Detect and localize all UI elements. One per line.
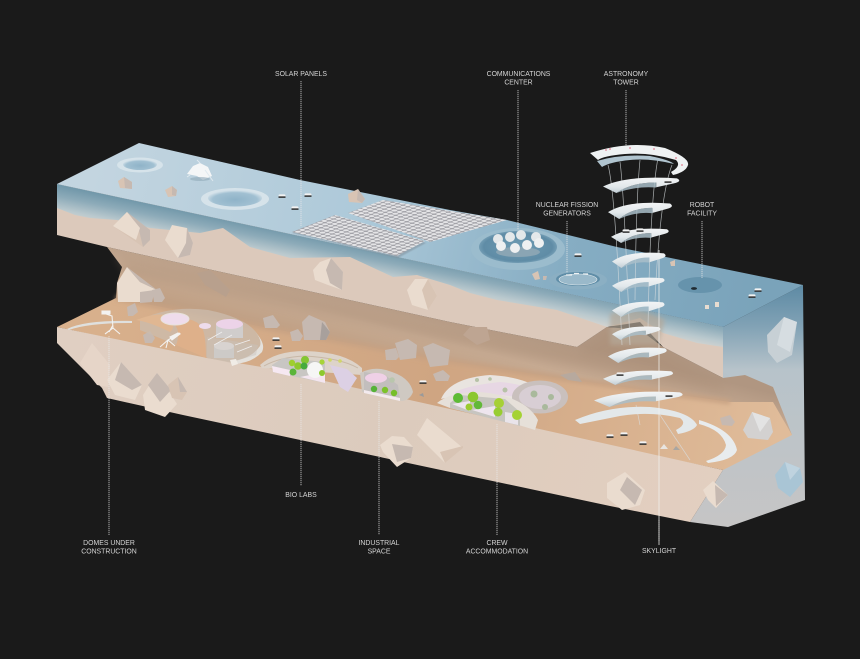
- skylight column: [658, 250, 660, 545]
- tan mound: [136, 314, 173, 332]
- label: industrial space: INDUSTRIAL: [359, 540, 400, 547]
- label: domes under construction: [81, 336, 137, 556]
- ring 9: [608, 348, 667, 363]
- label: astronomy tower: ASTRONOMY: [604, 71, 649, 78]
- pink tanks: [161, 313, 189, 325]
- ring 12: [575, 407, 697, 434]
- lilac panel: [330, 365, 357, 392]
- panel: cave back wall: [107, 247, 792, 435]
- front boulder 8: [703, 481, 728, 508]
- label: robot facility: FACILITY: [687, 210, 717, 218]
- front boulder 2: [107, 362, 142, 400]
- crater 1: [117, 158, 163, 172]
- outer dome shell: [140, 309, 262, 363]
- front boulder 4: [168, 377, 187, 400]
- front boulder left: [80, 343, 110, 387]
- ring 5: [612, 253, 666, 268]
- lunar base cross-section illustration: [57, 143, 805, 545]
- label: robot facility: [687, 202, 717, 278]
- label: skylight: [642, 520, 677, 555]
- label: astronomy tower: [604, 71, 649, 146]
- label: domes under construction: CONSTRUCTION: [81, 548, 137, 556]
- right face boulder: [775, 462, 803, 497]
- nuclear fission generators: [549, 270, 607, 290]
- back dome: [441, 375, 541, 406]
- label: crew accommodation: ACCOMMODATION: [466, 548, 528, 556]
- scaffolding: [207, 337, 258, 362]
- ring 8: [612, 326, 660, 340]
- label: robot facility: ROBOT: [690, 202, 715, 209]
- surface rocks: [118, 177, 675, 280]
- panel: cave floor: [57, 298, 792, 470]
- astronomy tower: [575, 145, 737, 463]
- boulder 4: [407, 279, 437, 310]
- blue regolith gradient on front face: [57, 184, 723, 347]
- label: skylight: SKYLIGHT: [642, 548, 677, 555]
- floor rovers: [272, 337, 680, 450]
- label: nuclear fission generators: GENERATORS: [543, 210, 591, 218]
- icon: construction robot left: [102, 311, 120, 334]
- tower cables: [608, 158, 690, 460]
- ring 1: [590, 145, 688, 175]
- label: crew accommodation: CREW: [486, 540, 508, 547]
- skylight shaft shading: [610, 310, 665, 345]
- panel: upper slab front face: [57, 184, 723, 378]
- ring 6: [612, 278, 665, 292]
- ring 10: [603, 371, 673, 385]
- label: communications center: COMMUNICATIONS: [487, 71, 551, 78]
- panel: right end face: [690, 285, 805, 527]
- window interior: [272, 358, 325, 383]
- communications center: [471, 228, 565, 270]
- soft floor and wall junction: [116, 298, 730, 402]
- panel: lower slab front face: [57, 327, 723, 522]
- domes under construction: [67, 309, 263, 366]
- icon: lunar lander: [187, 160, 213, 181]
- panel: upper lunar surface: [57, 143, 803, 327]
- front boulder 5: [380, 436, 413, 467]
- crew accommodation: [437, 375, 568, 430]
- crater 2: [201, 188, 269, 210]
- label: astronomy tower: TOWER: [613, 80, 639, 86]
- label: bio labs: BIO LABS: [285, 492, 317, 499]
- front shell: [437, 392, 538, 430]
- boulder right face: [767, 317, 797, 363]
- upper slab boulders: [113, 212, 797, 363]
- label: nuclear fission generators: [536, 202, 598, 273]
- label: nuclear fission generators: NUCLEAR FISSION: [536, 202, 598, 209]
- window interior: [450, 395, 520, 426]
- label: industrial space: SPACE: [368, 548, 391, 556]
- cave ceiling shadow: [115, 255, 723, 392]
- front boulder 3: [143, 373, 177, 417]
- label: domes under construction: DOMES UNDER: [83, 540, 135, 547]
- dome shell: [260, 351, 362, 375]
- ring 3: [608, 203, 672, 219]
- surface rovers: [278, 193, 762, 309]
- label: crew accommodation: [466, 424, 528, 556]
- icon: construction robot right: [160, 333, 180, 348]
- trees: [453, 393, 463, 403]
- cave rocks: [117, 267, 773, 440]
- side dome: [512, 380, 568, 414]
- trees: [289, 360, 295, 366]
- ring 7: [612, 302, 665, 317]
- ring 11: [594, 392, 683, 407]
- bio labs: [260, 351, 362, 392]
- label: industrial space: [359, 401, 400, 556]
- ring 2: [603, 178, 679, 193]
- front boulder 7: [607, 472, 645, 510]
- boulder 1: [113, 212, 150, 247]
- boulder 3: [313, 258, 343, 290]
- front boulders: [80, 343, 803, 510]
- ring 13: [699, 420, 737, 463]
- ring cars: [616, 179, 672, 397]
- base ring: [233, 333, 263, 364]
- label: bio labs: [285, 384, 317, 499]
- ring 4: [611, 229, 669, 243]
- robot facility: [678, 277, 722, 293]
- label: solar panels: SOLAR PANELS: [275, 71, 327, 78]
- front boulder 6: [417, 418, 463, 463]
- label: communications center: [487, 71, 551, 230]
- label: communications center: CENTER: [504, 80, 533, 86]
- industrial space: [360, 369, 413, 401]
- boulder 2: [165, 225, 193, 258]
- solar panels: [292, 200, 507, 258]
